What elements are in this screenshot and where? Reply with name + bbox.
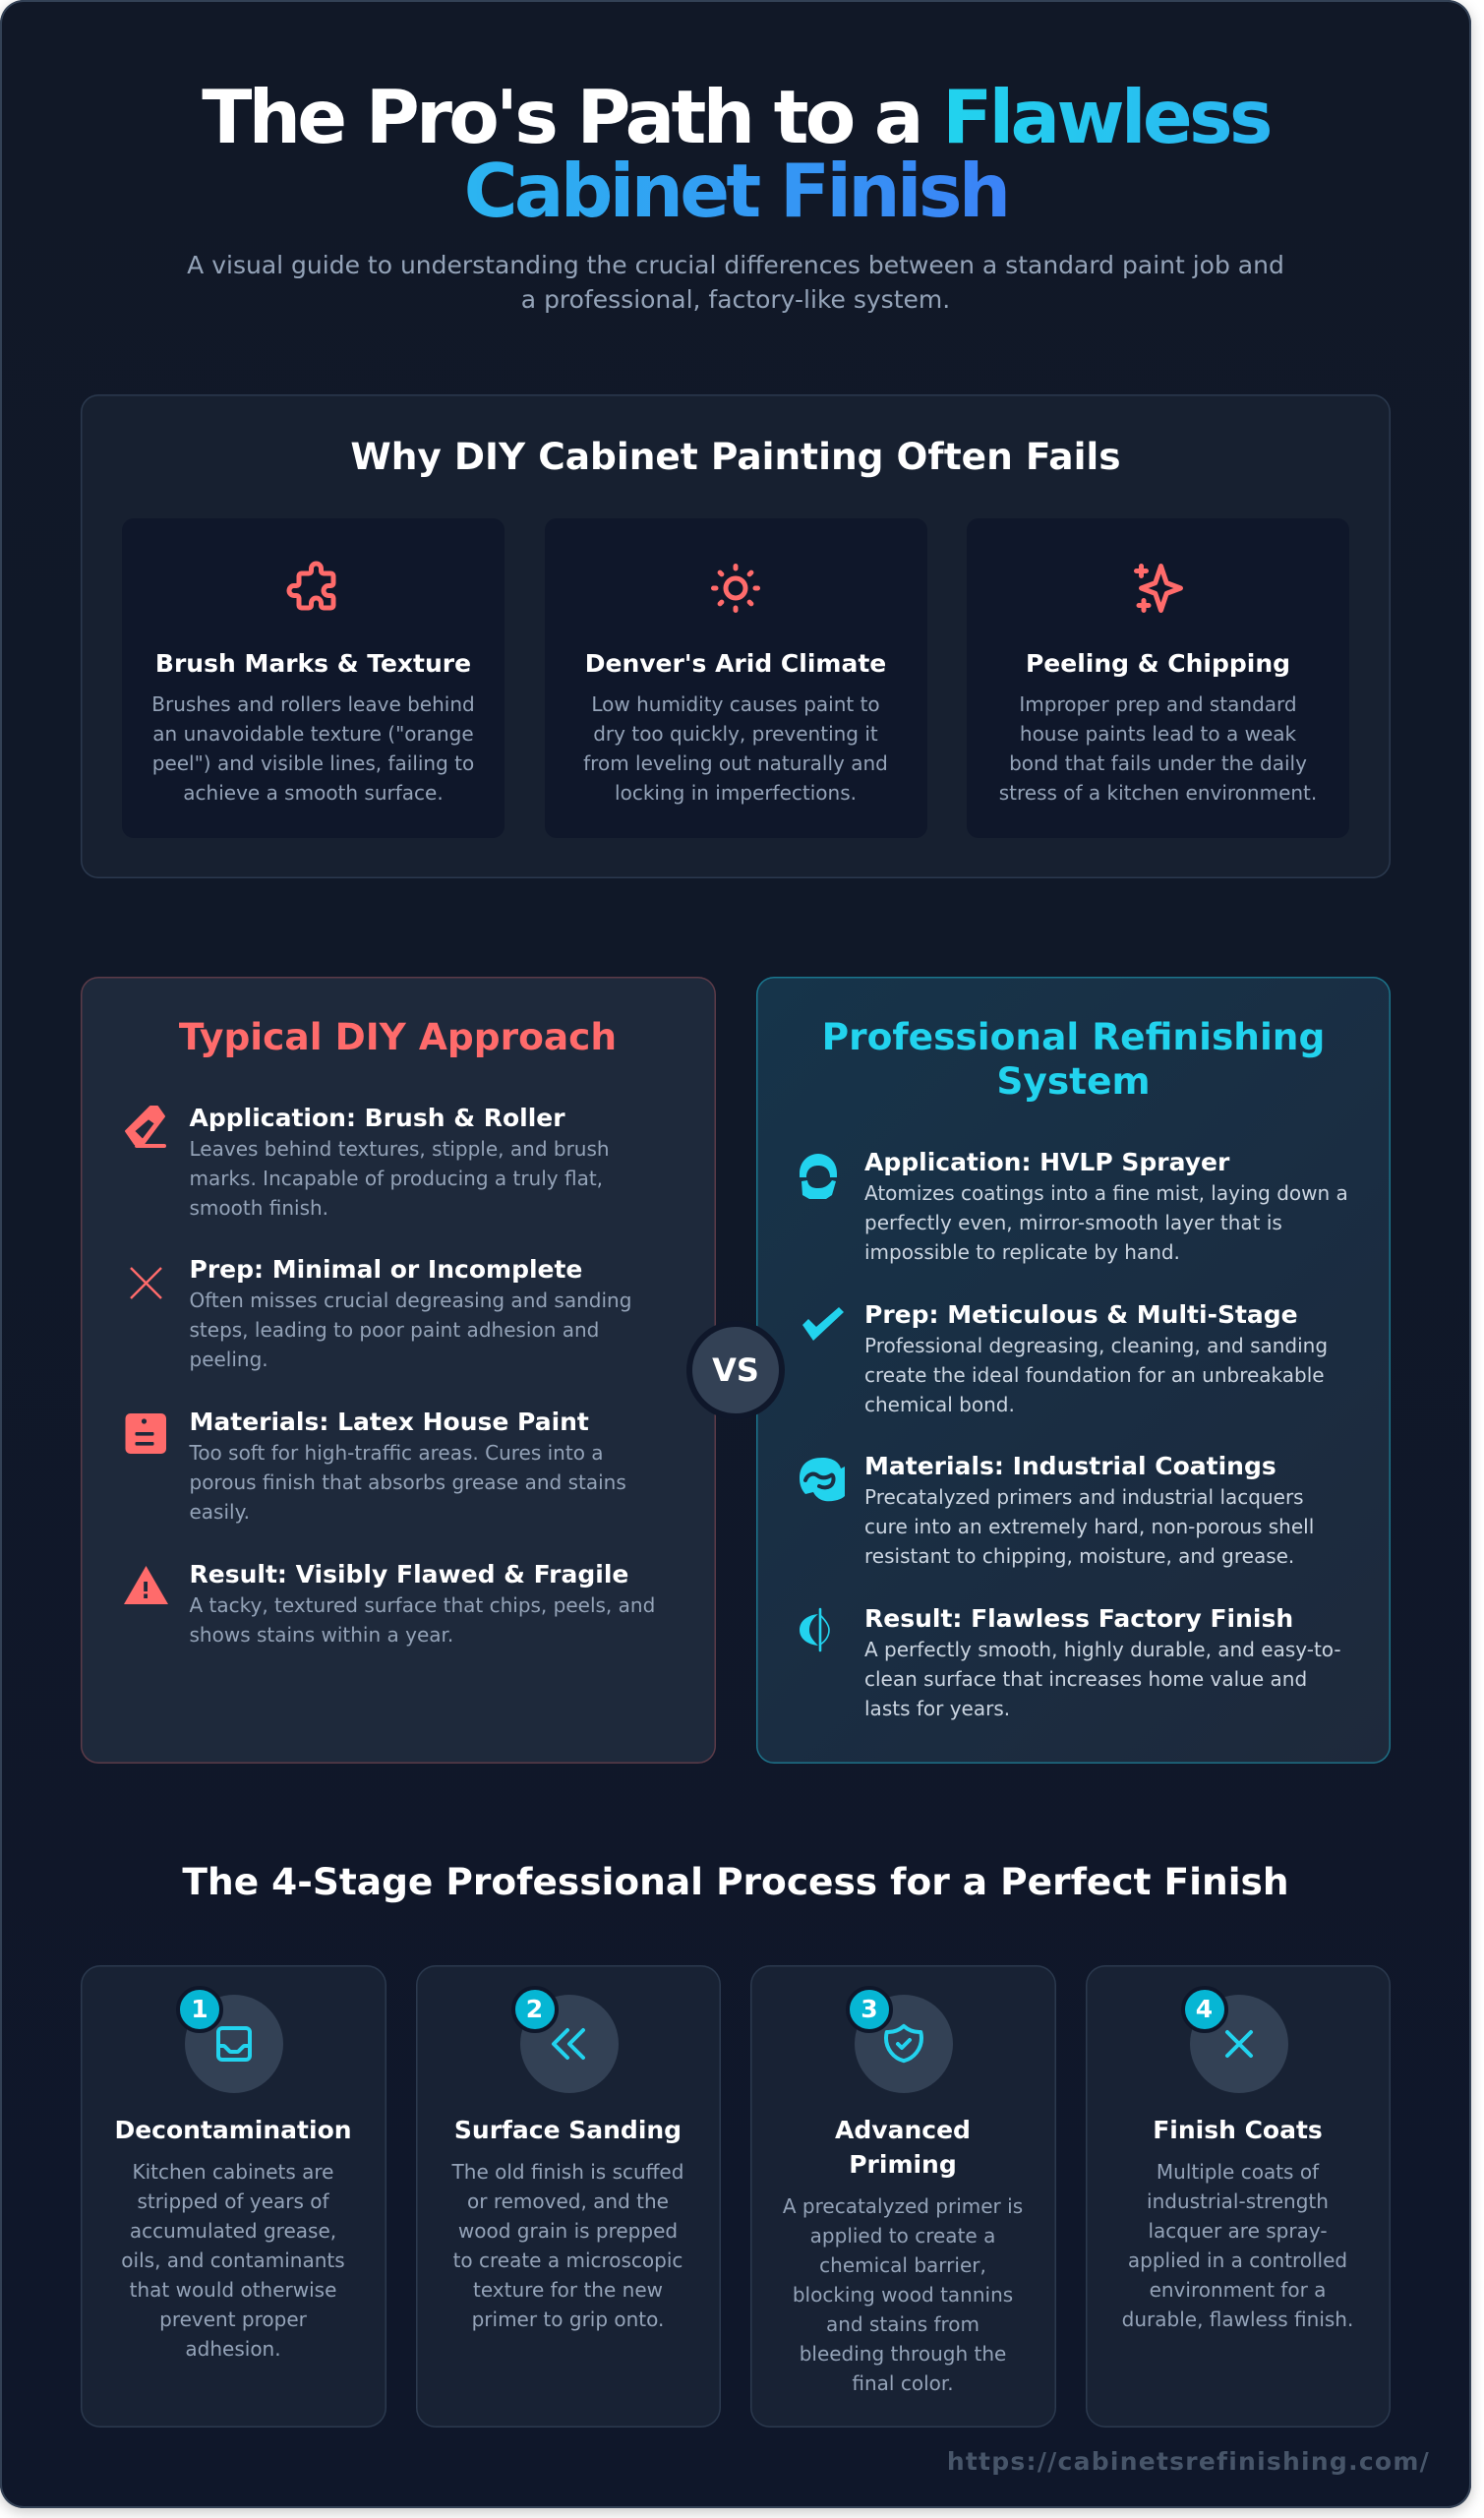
item: result bbox=[124, 1560, 655, 1647]
icon: sprayer bbox=[800, 1154, 837, 1199]
card title: Brush Marks & Texture bbox=[155, 649, 471, 677]
icon: sparkles bbox=[1134, 564, 1183, 613]
stage text: durable, flawless finish. bbox=[1122, 2308, 1353, 2331]
card: peeling bbox=[967, 518, 1349, 838]
stage text: stripped of years of bbox=[137, 2189, 329, 2213]
item text: smooth finish. bbox=[189, 1196, 328, 1220]
icon: paint can bbox=[126, 1413, 166, 1454]
card text: house paints lead to a weak bbox=[1020, 722, 1296, 746]
heading: DIY: Typical DIY Approach bbox=[179, 1015, 617, 1058]
item text: Leaves behind textures, stipple, and brush bbox=[189, 1137, 610, 1161]
stage text bbox=[451, 2160, 683, 2331]
stage text: applied in a controlled bbox=[1128, 2248, 1347, 2272]
item text: chemical bond. bbox=[864, 1393, 1015, 1416]
stage text: or removed, and the bbox=[467, 2189, 669, 2213]
stage title: Priming bbox=[849, 2150, 957, 2179]
item title: Prep: Meticulous & Multi-Stage bbox=[864, 1300, 1298, 1329]
stage title bbox=[835, 2116, 971, 2179]
stage 2 card bbox=[415, 1965, 721, 2428]
step badge 2 bbox=[511, 1986, 559, 2033]
card text: from leveling out naturally and bbox=[583, 751, 888, 775]
icon: thin x bbox=[130, 1267, 162, 1299]
stage text: Kitchen cabinets are bbox=[132, 2160, 333, 2184]
step badge 3: 3 bbox=[861, 1995, 878, 2023]
stage text: primer to grip onto. bbox=[472, 2308, 664, 2331]
item text: shows stains within a year. bbox=[189, 1623, 453, 1647]
item text bbox=[189, 1593, 655, 1647]
step badge 2: 2 bbox=[526, 1995, 543, 2023]
stage title: Surface Sanding bbox=[454, 2116, 682, 2144]
card text bbox=[151, 692, 475, 805]
card text: bond that fails under the daily bbox=[1009, 751, 1307, 775]
item text: Precatalyzed primers and industrial lacquers bbox=[864, 1485, 1304, 1509]
item text: easily. bbox=[189, 1500, 250, 1524]
panel: why DIY fails bbox=[81, 394, 1391, 878]
item text: create the ideal foundation for an unbreakable bbox=[864, 1363, 1325, 1387]
card text bbox=[583, 692, 888, 805]
item text: cure into an extremely hard, non-porous shell bbox=[864, 1515, 1314, 1538]
stage text: prevent proper bbox=[159, 2308, 307, 2331]
card text: Brushes and rollers leave behind bbox=[151, 692, 475, 716]
item text: impossible to replicate by hand. bbox=[864, 1240, 1180, 1264]
stage text: The old finish is scuffed bbox=[452, 2160, 683, 2184]
stage text: accumulated grease, bbox=[130, 2219, 336, 2243]
item text bbox=[864, 1334, 1328, 1416]
icon: x bbox=[1190, 1995, 1288, 2093]
subtitle bbox=[187, 251, 1284, 314]
item title: Result: Flawless Factory Finish bbox=[864, 1604, 1293, 1633]
item text bbox=[864, 1638, 1341, 1720]
item text: peeling. bbox=[189, 1348, 268, 1371]
stage text: chemical barrier, bbox=[819, 2253, 986, 2277]
item text bbox=[189, 1441, 626, 1524]
card text: an unavoidable texture ("orange bbox=[152, 722, 474, 746]
icon: sun bbox=[711, 564, 760, 613]
stage text: to create a microscopic bbox=[453, 2248, 683, 2272]
item title: Application: Brush & Roller bbox=[189, 1104, 565, 1132]
stage text: industrial-strength bbox=[1147, 2189, 1329, 2213]
item text: porous finish that absorbs grease and stains bbox=[189, 1470, 626, 1494]
panel: professional system bbox=[756, 977, 1391, 1764]
stage text: bleeding through the bbox=[800, 2342, 1006, 2366]
subtitle: a professional, factory-like system. bbox=[521, 285, 950, 314]
title: The Pro's Path to a Flawless bbox=[202, 73, 1270, 159]
card: brush marks bbox=[122, 518, 505, 838]
item text: marks. Incapable of producing a truly flat, bbox=[189, 1167, 603, 1190]
stage 1 card bbox=[81, 1965, 386, 2428]
stage 4 card bbox=[1086, 1965, 1391, 2428]
heading: process: The 4-Stage Professional Process for a Perfect Finish bbox=[182, 1860, 1289, 1903]
VS badge: VS bbox=[712, 1351, 759, 1389]
stage text: environment for a bbox=[1150, 2278, 1326, 2302]
VS badge bbox=[686, 1321, 785, 1419]
stage text: oils, and contaminants bbox=[121, 2248, 345, 2272]
item text bbox=[864, 1181, 1348, 1264]
stage 3 card bbox=[750, 1965, 1056, 2428]
stage text: applied to create a bbox=[810, 2224, 995, 2248]
stage text: that would otherwise bbox=[130, 2278, 336, 2302]
stage text: final color. bbox=[852, 2371, 954, 2395]
heading: professional: System bbox=[996, 1059, 1151, 1103]
item text: A tacky, textured surface that chips, peels, and bbox=[189, 1593, 655, 1617]
item text: lasts for years. bbox=[864, 1697, 1010, 1720]
stage text: and stains from bbox=[826, 2312, 979, 2336]
item title: Materials: Latex House Paint bbox=[189, 1408, 589, 1436]
stage text: blocking wood tannins bbox=[793, 2283, 1013, 2307]
icon: double chevron bbox=[519, 1995, 618, 2093]
item text: A perfectly smooth, highly durable, and easy-to- bbox=[864, 1638, 1341, 1661]
stage text: A precatalyzed primer is bbox=[783, 2194, 1023, 2218]
stage text bbox=[783, 2194, 1023, 2395]
heading: professional: Professional Refinishing bbox=[822, 1015, 1325, 1058]
stage text: lacquer are spray- bbox=[1148, 2219, 1328, 2243]
panel: typical DIY approach bbox=[81, 977, 716, 1764]
item: materials bbox=[126, 1408, 626, 1524]
card title: Peeling & Chipping bbox=[1026, 649, 1290, 677]
stage text: adhesion. bbox=[185, 2337, 281, 2361]
icon: check bbox=[802, 1307, 844, 1341]
item: result bbox=[800, 1604, 1341, 1720]
icon: warning triangle bbox=[124, 1566, 168, 1604]
title: Cabinet Finish bbox=[464, 148, 1007, 234]
card title: Denver's Arid Climate bbox=[585, 649, 886, 677]
stage title: Finish Coats bbox=[1153, 2116, 1323, 2144]
card text: achieve a smooth surface. bbox=[183, 781, 444, 805]
stage text: texture for the new bbox=[473, 2278, 663, 2302]
item text bbox=[189, 1289, 631, 1371]
icon: eraser bbox=[125, 1106, 166, 1148]
card text: dry too quickly, preventing it bbox=[593, 722, 878, 746]
item text: steps, leading to poor paint adhesion and bbox=[189, 1318, 599, 1342]
item: prep bbox=[130, 1255, 631, 1371]
icon: puzzle bbox=[287, 561, 336, 610]
card text: stress of a kitchen environment. bbox=[999, 781, 1317, 805]
item text bbox=[864, 1485, 1314, 1568]
item text: clean surface that increases home value and bbox=[864, 1667, 1307, 1691]
item title: Application: HVLP Sprayer bbox=[864, 1148, 1229, 1176]
card: arid climate bbox=[545, 518, 926, 838]
stage title: Advanced bbox=[835, 2116, 971, 2144]
item text: perfectly even, mirror-smooth layer that is bbox=[864, 1211, 1282, 1234]
stage text bbox=[121, 2160, 345, 2361]
heading: professional bbox=[822, 1015, 1325, 1103]
card text: peel") and visible lines, failing to bbox=[152, 751, 474, 775]
item title: Prep: Minimal or Incomplete bbox=[189, 1255, 582, 1284]
icon: coating swirl bbox=[800, 1458, 845, 1501]
step badge 1: 1 bbox=[191, 1995, 208, 2023]
item: application bbox=[800, 1148, 1348, 1264]
icon: half moon bbox=[800, 1607, 830, 1652]
card text: Improper prep and standard bbox=[1019, 692, 1297, 716]
stage title: Decontamination bbox=[114, 2116, 352, 2144]
title bbox=[202, 73, 1270, 234]
step badge 3 bbox=[846, 1986, 893, 2033]
icon: inbox bbox=[185, 1995, 283, 2093]
card text: Low humidity causes paint to bbox=[591, 692, 880, 716]
heading: why DIY fails: Why DIY Cabinet Painting Often Fails bbox=[350, 435, 1121, 478]
item: prep bbox=[802, 1300, 1328, 1416]
icon: shield check bbox=[855, 1995, 953, 2093]
item text: Too soft for high-traffic areas. Cures into a bbox=[189, 1441, 604, 1465]
item: materials bbox=[800, 1452, 1314, 1568]
item text: Professional degreasing, cleaning, and sanding bbox=[864, 1334, 1328, 1357]
step badge 4: 4 bbox=[1196, 1995, 1213, 2023]
stage text: wood grain is prepped bbox=[458, 2219, 678, 2243]
item text: resistant to chipping, moisture, and grease. bbox=[864, 1544, 1294, 1568]
stage text: Multiple coats of bbox=[1157, 2160, 1319, 2184]
step badge 1 bbox=[176, 1986, 223, 2033]
item title: Materials: Industrial Coatings bbox=[864, 1452, 1276, 1480]
stage text bbox=[1122, 2160, 1353, 2331]
card text bbox=[999, 692, 1317, 805]
item: application bbox=[125, 1104, 610, 1220]
item text: Often misses crucial degreasing and sanding bbox=[189, 1289, 631, 1312]
card text: locking in imperfections. bbox=[615, 781, 857, 805]
step badge 4 bbox=[1180, 1986, 1227, 2033]
item text: Atomizes coatings into a fine mist, laying down a bbox=[864, 1181, 1348, 1205]
footer url: https://cabinetsrefinishing.com/ bbox=[947, 2447, 1430, 2475]
subtitle: A visual guide to understanding the crucial differences between a standard paint job and bbox=[187, 251, 1284, 279]
item text bbox=[189, 1137, 610, 1220]
item title: Result: Visibly Flawed & Fragile bbox=[189, 1560, 628, 1589]
